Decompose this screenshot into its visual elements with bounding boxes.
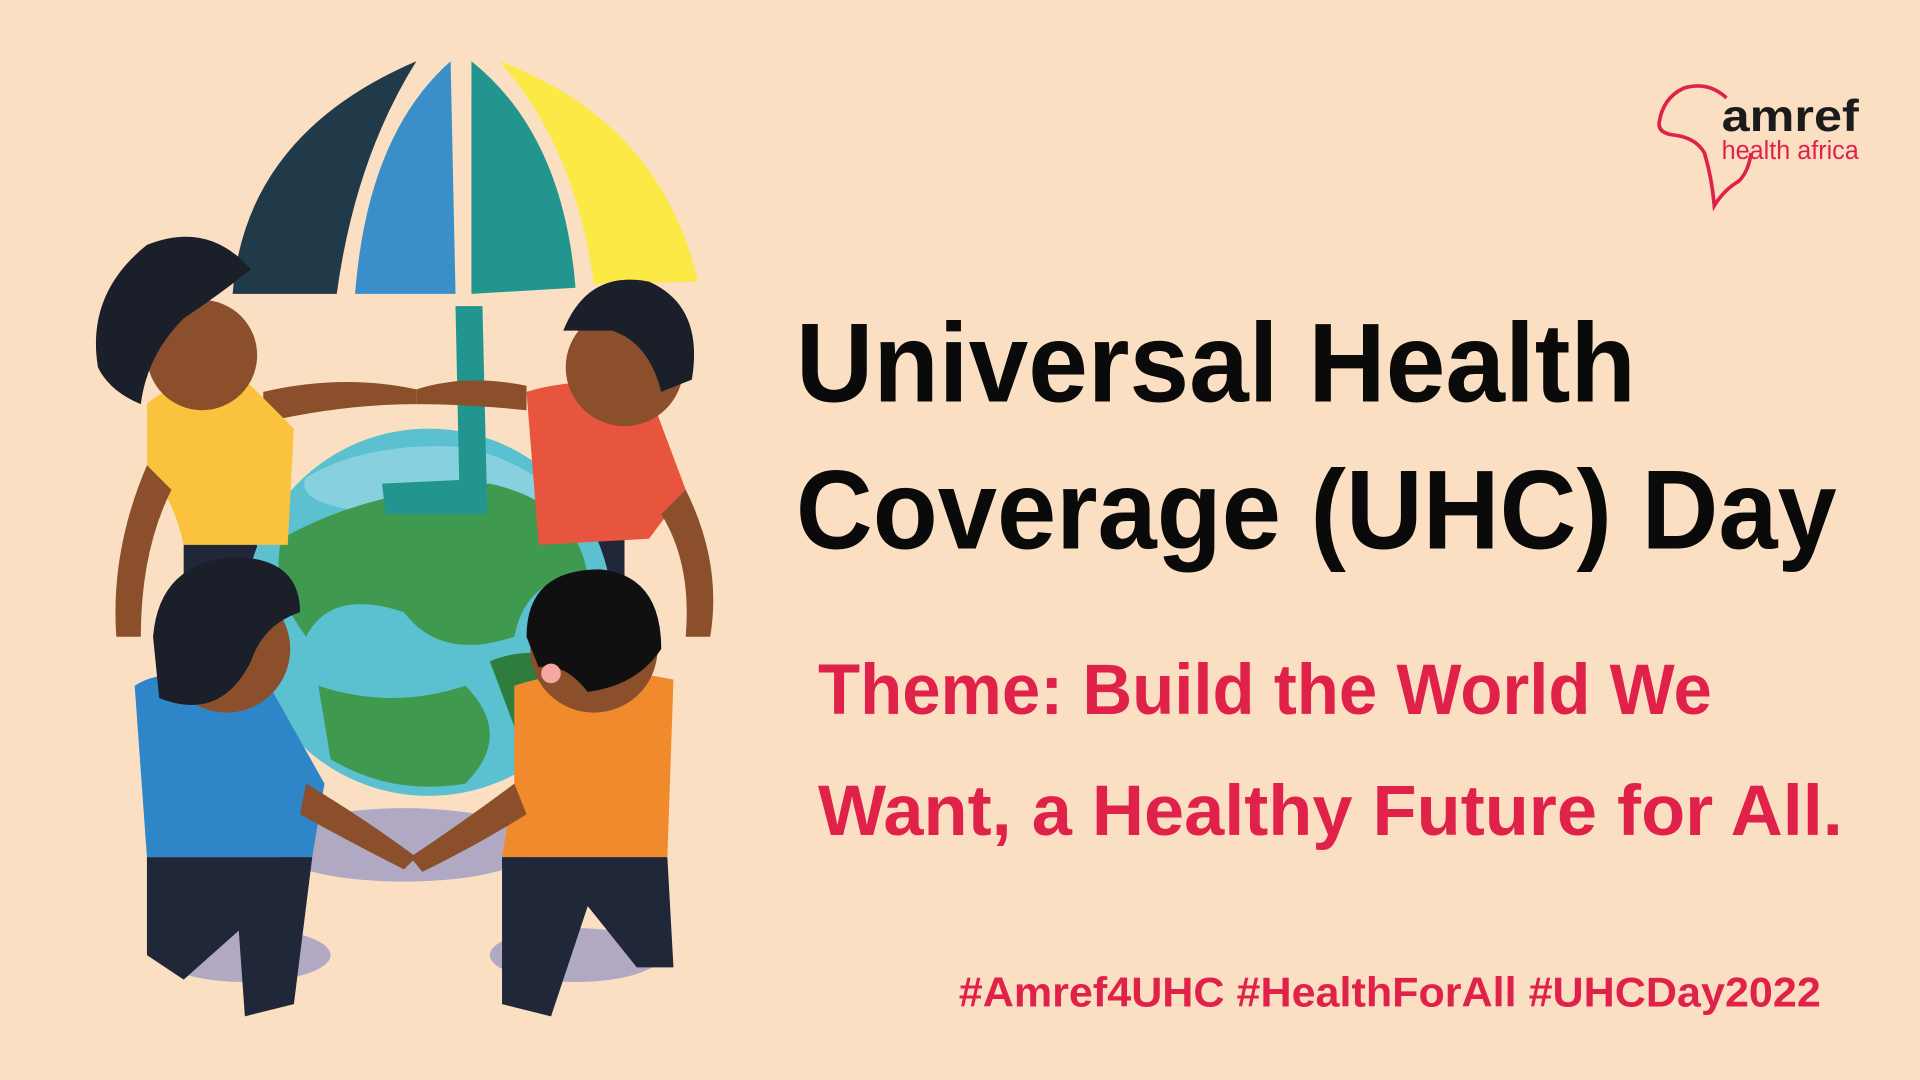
icon: umbrella (233, 61, 698, 514)
icon: globe (245, 429, 612, 796)
logo: amref health africa: amref (1722, 92, 1859, 141)
hashtags: #Amref4UHC #HealthForAll #UHCDay2022 (959, 969, 1821, 1016)
title: Coverage (UHC) Day (796, 447, 1837, 573)
logo: amref health africa (1659, 86, 1859, 206)
theme text: Theme: Build the World We (818, 651, 1712, 730)
title: Universal Health (796, 300, 1636, 426)
illustration: people around globe under umbrella (96, 61, 713, 1016)
legs back people (184, 527, 624, 600)
person: bottom-left blue (135, 557, 416, 1016)
person: top-left yellow (96, 237, 416, 637)
shadows (159, 808, 661, 982)
person: bottom-right orange (410, 569, 673, 1016)
title (796, 300, 1837, 573)
person: top-right red (416, 280, 713, 637)
theme text (818, 651, 1843, 851)
theme text: Want, a Healthy Future for All. (818, 772, 1843, 851)
logo: amref health africa: health africa (1722, 137, 1859, 165)
